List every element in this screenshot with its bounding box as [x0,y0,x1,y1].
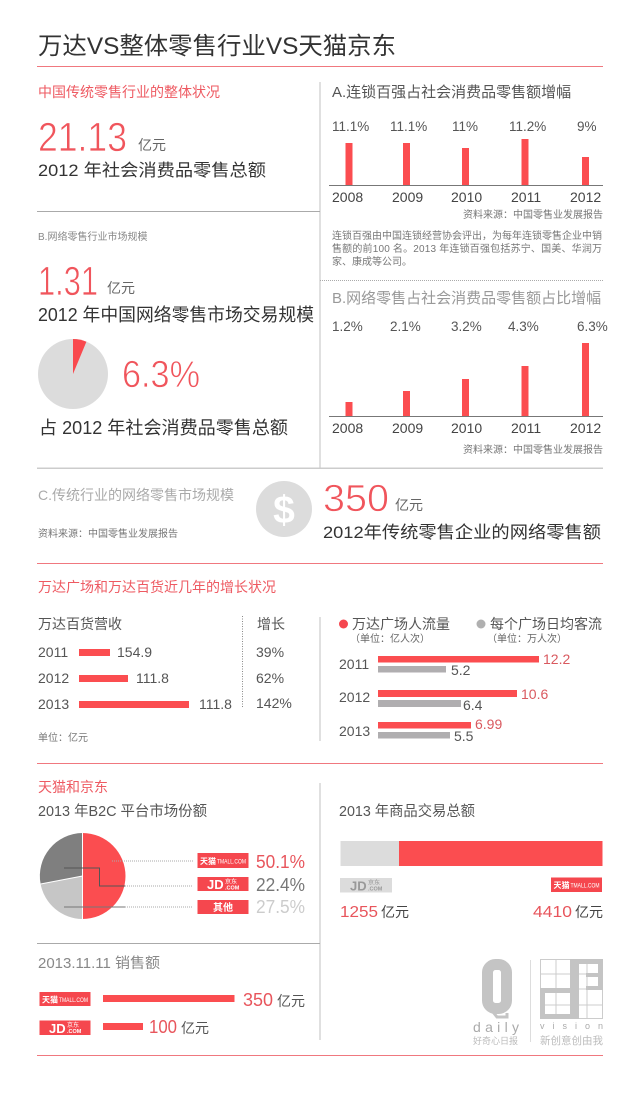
logo: JD: 京东 [225,878,237,886]
logo: Qdaily: 好奇心日报 [473,1035,518,1046]
heading: overall status: 中国传统零售行业的整体状况 [38,84,220,100]
legend: plaza traffic [339,616,450,645]
unit: 亿元: 亿元 [138,137,166,153]
note on top 100 chains: 连锁百强由中国连锁经营协会评出，为每年连锁零售企业中销 [332,229,602,242]
row 2011 [339,651,570,678]
icon: dollar coin: $ [273,489,295,532]
unit: 亿元: 亿元 [107,280,135,296]
logo: Tmall: 天猫 [200,856,216,866]
unit: 亿元 [181,1020,209,1036]
subheading: B2C share: 2013 年B2C 平台市场份额 [38,803,207,820]
logo: JD grey: JD [350,878,367,894]
note on top 100 chains: 售额的前100 名。2013 年连锁百强包括苏宁、国美、华润万 [332,242,602,255]
logo: JD: JD [49,1021,66,1036]
year labels A: 2009 [392,189,423,205]
logo: Tmall [551,878,602,892]
panel: chart A top 100 chains [329,84,603,268]
note on top 100 chains [332,229,602,268]
value: 4410: 4410 [533,904,572,921]
logo: vision [540,959,603,1047]
value labels B: 3.2% [451,319,482,334]
row 2012: 6.4 [463,697,483,713]
logo: Qdaily [473,964,519,1046]
row 2013: 5.5 [454,728,474,744]
row 2013: 6.99 [475,716,502,732]
panel: Tmall and JD market share [38,779,305,919]
note on top 100 chains: 家、康成等公司。 [332,255,412,268]
legend: plaza traffic: 万达广场人流量 [352,616,450,632]
logo: Tmall: TMALL.COM [217,860,246,866]
panel: online retail market size [38,230,314,438]
leader lines [64,861,193,907]
stat: 21.13: 21.13 [38,114,127,160]
row 2012 [38,670,284,686]
logo: JD: 京东 [67,1021,79,1029]
row 2012: 10.6 [521,686,548,702]
row 2011 [38,644,284,660]
value labels B: 4.3% [508,319,539,334]
panel: Wanda plaza traffic [339,616,602,744]
stat caption: 2012年传统零售企业的网络零售额 [323,523,601,542]
pie chart: 6.3% [38,339,108,409]
source C: 资料来源：中国零售业发展报告 [38,527,178,540]
year labels B: 2009 [392,420,423,436]
logo: vision: 新创意创由我 [540,1034,603,1047]
pie chart: B2C share [40,833,125,919]
subheading: B.网络零售行业市场规模 [38,230,147,243]
year labels B [332,420,601,436]
panel: traditional retail online sales [38,478,601,542]
logo: Tmall: TMALL.COM [570,884,600,890]
row 2011: 5.2 [451,662,471,678]
logo: JD [198,877,248,892]
row 2011: 154.9 [117,644,152,660]
stat: 6.3%: 6.3% [122,354,200,396]
bar chart A [346,139,589,185]
row 2013: 2013 [339,723,370,739]
bar: Tmall sales [103,995,234,1002]
value labels A: 11.1% [332,119,369,134]
logo: others [198,900,248,914]
panel: GMV comparison [339,802,603,921]
unit: 亿元 [277,993,305,1009]
column heading: revenue: 万达百货营收 [38,616,122,632]
value labels A: 11.2% [509,119,546,134]
legend: daily visitors: 每个广场日均客流 [490,616,602,632]
heading B: B.网络零售占社会消费品零售额占比增幅 [332,290,601,307]
logo: Tmall: 天猫 [554,880,570,890]
pie caption: 占 2012 年社会消费品零售总额 [39,418,288,438]
value labels A: 9% [577,119,597,134]
heading: Tmall and JD: 天猫和京东 [38,779,108,795]
row 2012: 2012 [38,670,69,686]
logo: JD grey: 京东 [368,878,380,886]
panel: chart B online retail share [329,290,608,456]
year labels A: 2012 [570,189,601,205]
value: 100: 100 [149,1017,177,1037]
row 2013: 142% [256,695,292,711]
logo: vision: vision [540,1021,603,1031]
logo: JD: JD [207,877,224,892]
share: JD: 22.4% [256,875,305,895]
row 2011: 2011 [339,656,369,672]
stacked bar: JD vs Tmall [340,841,602,866]
logo: Tmall [198,853,248,868]
logo: JD: .COM [67,1029,82,1035]
unit: 亿元 [381,904,409,920]
value labels B [332,319,608,334]
year labels A [332,189,601,205]
value labels B: 2.1% [390,319,421,334]
year labels A: 2008 [332,189,363,205]
row 2011: 2011 [38,644,68,660]
bar chart B [346,343,589,416]
value labels A: 11% [452,119,478,134]
row 2012: 111.8 [136,670,169,686]
panel: Wanda department store revenue [38,616,292,744]
logo: Tmall: 天猫 [42,994,58,1004]
logo: JD [40,1020,90,1036]
value labels A: 11.1% [390,119,427,134]
unit: 亿元: 亿元 [395,497,423,513]
value labels A [332,119,597,134]
panel: 11.11 sales [38,955,305,1037]
column heading: growth: 增长 [257,616,285,632]
value: 1255: 1255 [340,904,378,921]
stat caption: 2012 年中国网络零售市场交易规模 [38,305,314,325]
heading C: C.传统行业的网络零售市场规模 [38,487,234,503]
unit: 亿元 [575,904,603,920]
stat caption: 2012 年社会消费品零售总额 [38,161,266,180]
row 2012: 62% [256,670,284,686]
subheading: GMV: 2013 年商品交易总额 [339,802,475,820]
logo: JD grey [340,878,392,894]
unit note: 单位：亿元 [38,731,88,744]
bar: JD sales [103,1023,143,1030]
row 2013: 2013 [38,696,69,712]
value labels B: 1.2% [332,319,363,334]
stat: 350: 350 [323,478,389,520]
heading A: A.连锁百强占社会消费品零售额增幅 [332,84,571,101]
year labels B: 2012 [570,420,601,436]
panel: overall retail status [38,84,266,180]
row 2013: 111.8 [199,696,232,712]
share: others: 27.5% [256,897,305,917]
row 2012: 2012 [339,689,370,705]
logo: Tmall [40,992,90,1006]
year labels B: 2011 [511,420,541,436]
legend: daily visitors [476,616,602,645]
logo: JD: .COM [225,886,240,892]
stat: 1.31: 1.31 [38,258,98,304]
year labels B: 2008 [332,420,363,436]
logo: Tmall: TMALL.COM [59,998,88,1004]
row 2013 [339,716,502,744]
legend: daily visitors: （单位：万人次） [487,632,567,645]
source B: 资料来源：中国零售业发展报告 [463,443,603,456]
row 2011: 12.2 [543,651,570,667]
value: 350: 350 [243,990,273,1010]
year labels B: 2010 [451,420,482,436]
value labels B: 6.3% [577,319,608,334]
row 2011: 39% [256,644,284,660]
subheading: 11.11 sales: 2013.11.11 销售额 [38,955,161,972]
heading: Wanda growth: 万达广场和万达百货近几年的增长状况 [38,579,276,595]
logo: Qdaily: daily [473,1019,519,1035]
row 2013 [38,695,292,712]
logo: others: 其他 [213,901,233,914]
share: Tmall: 50.1% [256,852,305,872]
year labels A: 2011 [511,189,541,205]
year labels A: 2010 [451,189,482,205]
source A: 资料来源：中国零售业发展报告 [463,208,603,221]
title: 万达VS整体零售行业VS天猫京东 [38,33,396,60]
row 2012 [339,686,548,713]
logo: JD grey: .COM [368,886,383,892]
legend: plaza traffic: （单位：亿人次） [350,632,430,645]
icon: dollar coin [256,481,312,537]
